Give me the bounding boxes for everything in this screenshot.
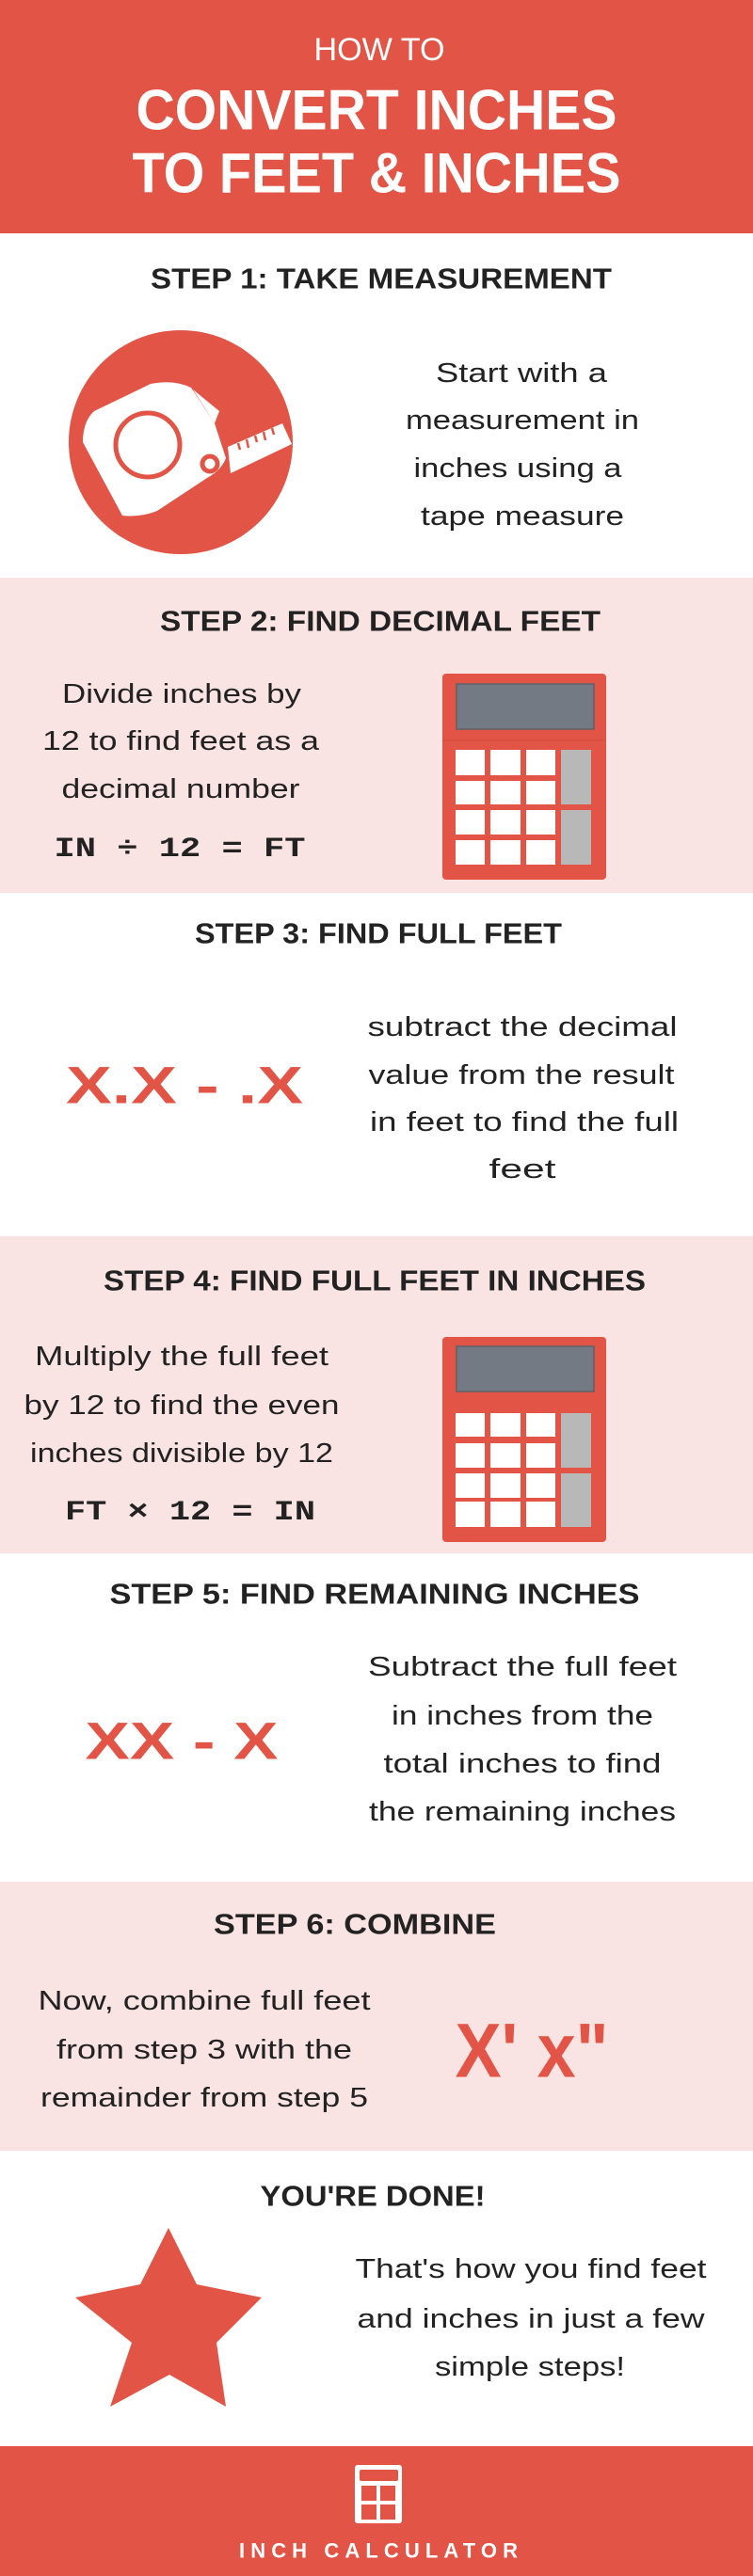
text step 5: the remaining inches (369, 1797, 676, 1827)
text step 4: inches divisible by 12 (30, 1439, 333, 1469)
heading step 6: STEP 6: COMBINE (214, 1908, 496, 1940)
text done: simple steps! (435, 2352, 625, 2382)
title: TO FEET & INCHES (132, 141, 621, 205)
text step 5: Subtract the full feet (368, 1652, 677, 1682)
panel: step 2 (0, 578, 753, 893)
text step 6: Now, combine full feet (38, 1986, 371, 2016)
text step 3: feet (489, 1154, 555, 1185)
text step 5: total inches to find (384, 1749, 661, 1779)
panel: step 3 (0, 893, 753, 1237)
heading step 5: STEP 5: FIND REMAINING INCHES (109, 1577, 640, 1611)
text step 2: decimal number (62, 774, 300, 804)
title (132, 79, 621, 205)
text step 4 (24, 1342, 339, 1469)
text step 1: measurement in (406, 405, 639, 436)
panel: done (0, 2151, 753, 2446)
icon: star (75, 2228, 262, 2407)
panel: step 6 (0, 1882, 753, 2151)
icon: calculator logo (355, 2465, 402, 2523)
text step 1: inches using a (414, 453, 623, 484)
text done: and inches in just a few (358, 2304, 706, 2334)
formula x.x - .x: X.X - .X (66, 1056, 303, 1114)
text step 3 (367, 1012, 679, 1185)
text step 6 (38, 1986, 371, 2113)
subtitle: how to: HOW TO (314, 32, 444, 68)
heading step 2: STEP 2: FIND DECIMAL FEET (160, 604, 601, 638)
formula step 4: FT × 12 = IN (65, 1497, 315, 1529)
formula step 2: IN ÷ 12 = FT (55, 834, 305, 866)
heading done: YOU'RE DONE! (260, 2179, 486, 2213)
brand name: INCH CALCULATOR (239, 2538, 518, 2563)
text step 4: by 12 to find the even (24, 1391, 339, 1421)
title: CONVERT INCHES (136, 79, 617, 141)
heading step 3: STEP 3: FIND FULL FEET (195, 916, 562, 950)
text done: That's how you find feet (356, 2254, 706, 2284)
icon: calculator (442, 674, 606, 880)
text step 1: Start with a (436, 358, 608, 389)
heading step 4: STEP 4: FIND FULL FEET IN INCHES (104, 1264, 646, 1296)
text step 6: from step 3 with the (56, 2035, 352, 2065)
text step 5 (368, 1652, 677, 1827)
heading step 1: STEP 1: TAKE MEASUREMENT (151, 262, 612, 295)
text step 1: tape measure (421, 501, 624, 532)
text step 3: in feet to find the full (370, 1107, 679, 1137)
panel: step 1 (0, 233, 753, 578)
header panel (0, 0, 753, 233)
panel: step 5 (0, 1553, 753, 1882)
text step 5: in inches from the (392, 1701, 653, 1731)
text step 2 (42, 679, 320, 804)
icon: calculator (442, 1337, 606, 1542)
text done (356, 2254, 706, 2382)
text step 3: subtract the decimal (367, 1012, 678, 1042)
icon: tape measure (69, 330, 293, 554)
text step 4: Multiply the full feet (35, 1342, 328, 1372)
text step 1 (406, 358, 639, 532)
text step 6: remainder from step 5 (40, 2083, 368, 2113)
text step 2: Divide inches by (62, 679, 302, 709)
text step 3: value from the result (369, 1060, 674, 1090)
footer (0, 2446, 753, 2576)
formula xx - x: XX - X (85, 1710, 279, 1771)
result X' x": X' x" (456, 2008, 608, 2094)
panel: step 4 (0, 1236, 753, 1553)
text step 2: 12 to find feet as a (42, 726, 320, 756)
